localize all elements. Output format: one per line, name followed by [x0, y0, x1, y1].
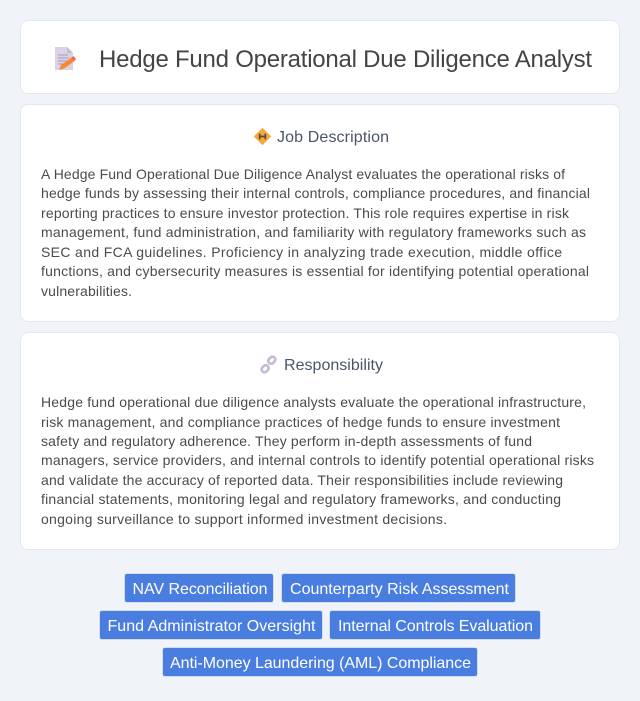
- text: responsibility body: Hedge fund operational due diligence analysts evaluate the operational infrastructure,: [41, 394, 586, 410]
- text: responsibility body: and validate the accuracy of reported data. Their responsibilities include reviewing: [41, 472, 563, 488]
- tag: Fund Administrator Oversight: Fund Administrator Oversight: [108, 618, 316, 635]
- tag: Anti-Money Laundering (AML) Compliance: Anti-Money Laundering (AML) Compliance: [170, 655, 471, 672]
- tag: Fund Administrator Oversight: [99, 610, 323, 640]
- icon: diamond sign: [254, 128, 271, 145]
- icon: document with pencil: [55, 47, 76, 70]
- panel: responsibility: [20, 332, 620, 550]
- text: job description body: functions, and cybersecurity measures is essential for identifying potential operational: [41, 263, 589, 279]
- text: job description body: SEC and FCA guidelines. Proficiency in analyzing trade execution, middle office: [41, 244, 562, 260]
- title: Hedge Fund Operational Due Diligence Analyst: [99, 46, 592, 73]
- heading: job description: Job Description: [277, 129, 389, 146]
- tag: NAV Reconciliation: NAV Reconciliation: [132, 581, 268, 598]
- text: job description body: A Hedge Fund Operational Due Diligence Analyst evaluates the operational risks of: [41, 166, 565, 182]
- text: responsibility body: financial statements, monitoring legal and regulatory frameworks, and conducting: [41, 491, 561, 507]
- text: responsibility body: managers, service providers, and internal controls to identify potential operational risks: [41, 452, 594, 468]
- text: job description body: vulnerabilities.: [41, 283, 132, 299]
- text: job description body: hedge funds by assessing their internal controls, compliance procedures, and financial: [41, 185, 590, 201]
- tag: Internal Controls Evaluation: Internal Controls Evaluation: [338, 618, 533, 635]
- text: responsibility body: safety and regulatory adherence. They perform in-depth assessments of fund: [41, 433, 532, 449]
- panel: job description: [20, 104, 620, 322]
- text: responsibility body: risk management, and compliance practices of hedge funds to ensure investment: [41, 414, 560, 430]
- text: job description body: management, fund administration, and familiarity with regulatory frameworks such as: [41, 224, 586, 240]
- panel: title card: [20, 20, 620, 94]
- text: job description body: [41, 166, 590, 299]
- text: job description body: reporting practices to ensure investor protection. This role requires expertise in risk: [41, 205, 570, 221]
- tag: Internal Controls Evaluation: [329, 610, 541, 640]
- text: responsibility body: [41, 394, 594, 527]
- icon: chain link: [260, 355, 277, 374]
- tag: Counterparty Risk Assessment: [281, 573, 516, 603]
- tag: Anti-Money Laundering (AML) Compliance: [162, 647, 478, 677]
- tag: Counterparty Risk Assessment: Counterparty Risk Assessment: [290, 581, 510, 598]
- text: responsibility body: ongoing surveillance to support informed investment decisions.: [41, 511, 447, 527]
- tag: NAV Reconciliation: [124, 573, 274, 603]
- heading: responsibility: Responsibility: [284, 357, 383, 374]
